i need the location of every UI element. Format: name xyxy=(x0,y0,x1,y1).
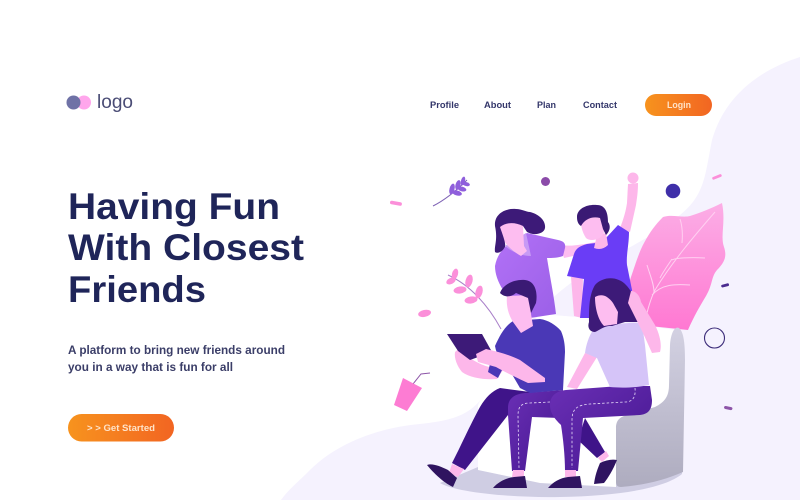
white seat xyxy=(478,314,676,487)
login button: Login xyxy=(667,100,691,111)
decorative marks xyxy=(390,174,733,410)
person: man legs and shoes xyxy=(427,388,563,488)
background blob xyxy=(281,57,800,500)
navigation: Contact xyxy=(583,100,618,111)
logo: logo xyxy=(97,92,133,113)
icon: pink plant xyxy=(445,268,501,329)
seat shadow xyxy=(440,445,682,497)
navigation: Profile xyxy=(430,100,459,111)
description text: you in a way that is fun for all xyxy=(68,360,233,374)
icon: drink cup xyxy=(394,373,430,411)
get started button xyxy=(68,414,174,442)
leaf xyxy=(629,203,725,330)
title: Friends xyxy=(68,269,206,310)
login button xyxy=(645,94,712,116)
title xyxy=(68,186,304,310)
seat side panel xyxy=(616,328,685,487)
person: man front with tablet xyxy=(447,280,565,393)
logo xyxy=(66,92,133,113)
person: man back right xyxy=(567,172,638,318)
navigation: About xyxy=(484,100,512,111)
icon: lavender sprig xyxy=(433,176,470,206)
description text xyxy=(68,343,285,374)
title: Having Fun xyxy=(68,186,280,227)
description text: A platform to bring new friends around xyxy=(68,343,285,357)
navigation: Plan xyxy=(537,100,556,111)
person: woman front xyxy=(548,278,661,488)
navigation xyxy=(430,100,618,111)
get started button: > > Get Started xyxy=(87,423,155,434)
person: woman back left xyxy=(495,209,596,318)
title: With Closest xyxy=(68,227,304,268)
